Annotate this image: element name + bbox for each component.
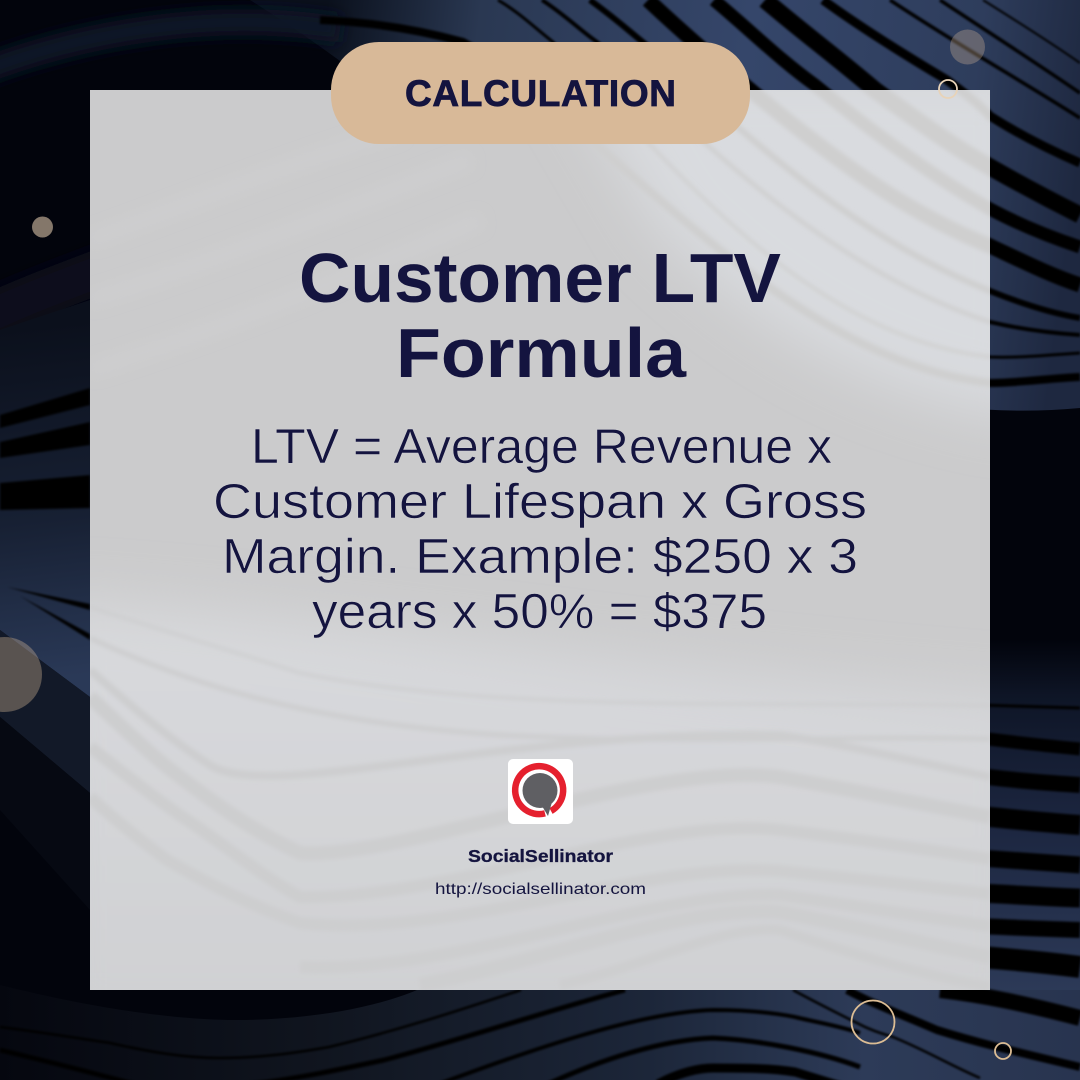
formula text block: Customer Lifespan x Gross (213, 475, 867, 529)
brand name: SocialSellinator (468, 846, 613, 866)
pill: section tag (331, 42, 750, 144)
title (299, 239, 781, 392)
decorative circle: left tan dot (32, 216, 53, 238)
decorative ring: bottom large (852, 1000, 894, 1044)
formula text block: years x 50% = $375 (312, 585, 767, 639)
decorative ring: top right (939, 80, 957, 98)
bottom curve bands (0, 990, 1080, 1080)
formula text block: LTV = Average Revenue x (251, 420, 832, 474)
decorative circle: top right grey (950, 30, 985, 64)
decorative circle: left large (0, 637, 42, 712)
pill: section tag: CALCULATION (405, 73, 676, 114)
formula text block: Margin. Example: $250 x 3 (222, 530, 858, 584)
upper right black stripes (320, 0, 1080, 383)
decorative ring: bottom small (995, 1043, 1011, 1059)
title: Customer LTV (299, 239, 781, 317)
left side black bands (0, 388, 90, 640)
logo: SocialSellinator (508, 759, 573, 824)
website url: http://socialsellinator.com (435, 881, 646, 898)
formula text block (213, 420, 867, 639)
panel: translucent card (90, 90, 990, 990)
title: Formula (396, 314, 687, 392)
right side black stripes (980, 705, 1080, 967)
